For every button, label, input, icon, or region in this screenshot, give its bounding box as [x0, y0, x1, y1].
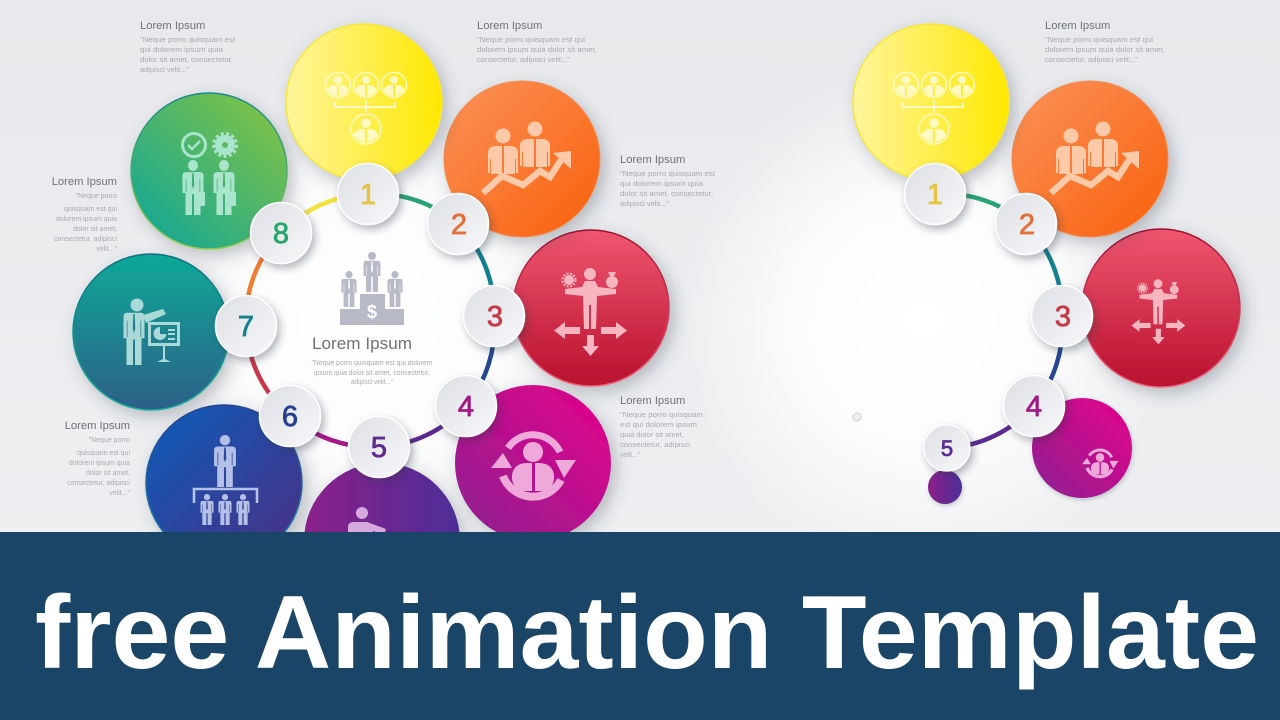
text block: step 4 caption	[620, 395, 703, 459]
text block: step 6 caption: Lorem Ipsum	[65, 420, 130, 432]
text block: step 6 caption: dolor sit amet,	[86, 470, 130, 477]
text block: step 6 caption: consectetur, adipisci	[67, 480, 130, 487]
number badges 1 to 8: 5	[371, 432, 387, 464]
tiny purple circle	[928, 470, 962, 504]
yellow circle	[853, 24, 1009, 180]
number badges 1 to 8	[216, 164, 524, 478]
segment 1: yellow circle	[286, 24, 442, 180]
number badges 1 to 8: 4	[458, 391, 474, 423]
segment 6: blue circle	[146, 405, 302, 561]
number badges 1 to 8: 1	[360, 179, 376, 211]
number badges 1 to 5: 2	[1019, 209, 1035, 241]
segment 5: purple circle	[304, 463, 460, 619]
text block: step 1 caption	[477, 20, 597, 64]
icon: center podium with three people: $	[367, 302, 377, 322]
text block: right copy caption: dolorem ipsum quia dolor sit amet,	[1045, 47, 1165, 54]
number badges 1 to 8: 7	[238, 311, 254, 343]
segment 2: orange circle	[444, 81, 600, 237]
number badges 1 to 8: 8	[273, 218, 289, 250]
text block: right copy caption: consectetur, adipisci velit..."	[1045, 57, 1139, 64]
text block: step 4 caption: quia dolor sit amet,	[620, 432, 684, 439]
icon: center podium with three people	[340, 252, 404, 325]
text block: step 7 caption: consectetur, adipisci	[54, 236, 117, 243]
number badges 1 to 5: 5	[941, 436, 953, 461]
text block: step 2 caption: Lorem Ipsum	[620, 154, 685, 166]
orange circle	[1012, 81, 1168, 237]
text block: step 6 caption: quisquam est qui	[77, 450, 130, 457]
center description: adipisci velit..."	[351, 379, 393, 386]
text block: step 4 caption: velit..."	[620, 452, 640, 459]
text block: step 8 top-left caption: "Neque porro quisquam est	[140, 37, 235, 44]
text block: step 8 top-left caption: adipisci velit..."	[140, 67, 190, 74]
text block: step 1 caption: consectetur, adipisci velit..."	[477, 57, 571, 64]
number badges 1 to 8: 3	[487, 301, 503, 333]
text block: step 6 caption: velit..."	[109, 490, 131, 497]
number badges 1 to 8: 2	[451, 209, 467, 241]
text block: step 1 caption: dolorem ipsum quia dolor sit amet,	[477, 47, 597, 54]
tiny appearing badge	[853, 413, 861, 421]
text block: step 4 caption: consectetur, adipisci	[620, 442, 690, 449]
text block: step 7 caption: quisquam est qui	[64, 206, 117, 213]
small magenta circle	[1032, 398, 1132, 498]
text block: step 2 caption: "Neque porro quisquam est	[620, 171, 715, 178]
panel: animation in progress copy of the diagram	[853, 24, 1240, 504]
text block: step 4 caption: "Neque porro quisquam	[620, 412, 703, 419]
red circle	[1082, 229, 1240, 387]
ring connector arcs	[246, 194, 494, 447]
text block: step 2 caption: adipisci velit..."	[620, 201, 670, 208]
text block: right copy caption: Lorem Ipsum	[1045, 20, 1110, 32]
text block: step 2 caption: qui dolorem ipsum quia	[620, 181, 703, 188]
text block: step 8 top-left caption: Lorem Ipsum	[140, 20, 205, 32]
number badges 1 to 5: 3	[1055, 301, 1071, 333]
text block: step 7 caption: dolor sit amet,	[73, 226, 117, 233]
segment 3: red circle	[513, 230, 669, 386]
text block: step 8 top-left caption: dolor sit amet, consectetur,	[140, 57, 233, 64]
center heading: Lorem Ipsum	[312, 334, 412, 353]
text block: step 4 caption: Lorem Ipsum	[620, 395, 685, 407]
number badges 1 to 5: 1	[927, 179, 943, 211]
number badges 1 to 5: 4	[1026, 391, 1042, 423]
text block: right copy caption: "Neque porro quisquam est qui	[1045, 37, 1153, 44]
text block: step 7 caption: velit..."	[96, 246, 118, 253]
center description: ipsum quia dolor sit amet, consectetur,	[314, 370, 430, 377]
number badges 1 to 8: 6	[282, 401, 298, 433]
text block: right copy caption	[1045, 20, 1165, 64]
text block: step 2 caption: dolor sit amet, consectetur,	[620, 191, 713, 198]
text block: step 6 caption: dolorem ipsum quia	[69, 460, 130, 467]
banner	[0, 532, 1280, 720]
text block: step 7 caption: Lorem Ipsum	[52, 176, 117, 188]
text block: step 6 caption: "Neque porro	[89, 437, 130, 444]
segment 7: teal circle	[73, 254, 229, 410]
center description: "Neque porro quisquam est qui dolorem	[312, 360, 433, 367]
text block: step 6 caption	[65, 420, 131, 497]
banner title: free Animation Template	[35, 575, 1259, 691]
segment 4: magenta circle	[455, 385, 611, 541]
text block: step 7 caption: dolorem ipsum quia	[56, 216, 117, 223]
number badges 1 to 5	[904, 164, 1092, 471]
text block: step 1 caption: Lorem Ipsum	[477, 20, 542, 32]
text block: step 7 caption	[52, 176, 118, 253]
text block: step 7 caption: "Neque porro	[76, 193, 117, 200]
text block: step 4 caption: est qui dolorem ipsum	[620, 422, 697, 429]
text block: step 1 caption: "Neque porro quisquam est qui	[477, 37, 585, 44]
text block: step 8 top-left caption	[140, 20, 235, 74]
center description	[312, 360, 433, 386]
text block: step 8 top-left caption: qui dolorem ipsum quia	[140, 47, 223, 54]
text block: step 2 caption	[620, 154, 715, 208]
panel: full eight-step cycle diagram	[73, 24, 669, 619]
segment 8: green circle	[131, 93, 287, 249]
partial ring connector arcs	[935, 194, 1062, 448]
